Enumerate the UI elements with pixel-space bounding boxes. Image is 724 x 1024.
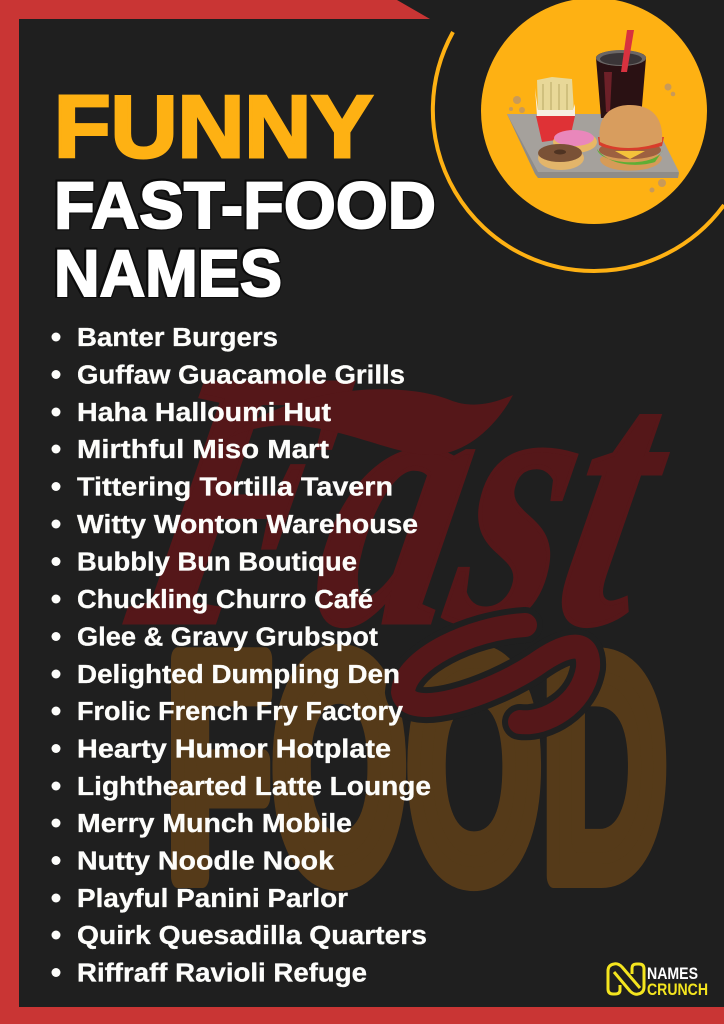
list names: Haha Halloumi Hut [77,399,332,427]
list names: Mirthful Miso Mart [77,436,330,464]
title [54,77,436,310]
title line: names: NAMES [54,236,282,310]
amber circle [481,0,707,224]
list names: Bubbly Bun Boutique [77,548,357,576]
name list [52,324,431,988]
title line: funny: FUNNY [54,77,373,176]
drink cup [596,30,646,118]
list bullets [52,332,60,977]
chocolate donut [538,144,584,170]
list names: Riffraff Ravioli Refuge [77,960,367,988]
burger [597,105,664,171]
title line: fast-food: FAST-FOOD [54,168,436,242]
tray [507,114,679,178]
list names: Frolic French Fry Factory [77,698,404,726]
list names: Banter Burgers [77,324,278,352]
list names: Tittering Tortilla Tavern [77,474,393,502]
icon: fast food tray [507,30,679,192]
fries [535,77,575,142]
list names: Witty Wonton Warehouse [77,511,418,539]
decorative arc [433,32,724,271]
list names: Merry Munch Mobile [77,810,352,838]
logo text: names: NAMES [647,964,698,983]
pink donut [553,130,597,153]
crumbs [509,84,675,192]
list names: Chuckling Churro Café [77,586,373,614]
list names: Playful Panini Parlor [77,885,348,913]
list names: Quirk Quesadilla Quarters [77,922,427,950]
list names: Guffaw Guacamole Grills [77,362,405,390]
list names: Delighted Dumpling Den [77,661,400,689]
list names: Lighthearted Latte Lounge [77,773,431,801]
logo: names crunch [608,964,708,999]
list names [77,324,431,988]
icon: logo mark [608,964,644,994]
list names: Nutty Noodle Nook [77,848,335,876]
logo text: crunch: CRUNCH [647,980,708,999]
list names: Glee & Gravy Grubspot [77,624,379,652]
list names: Hearty Humor Hotplate [77,736,391,764]
